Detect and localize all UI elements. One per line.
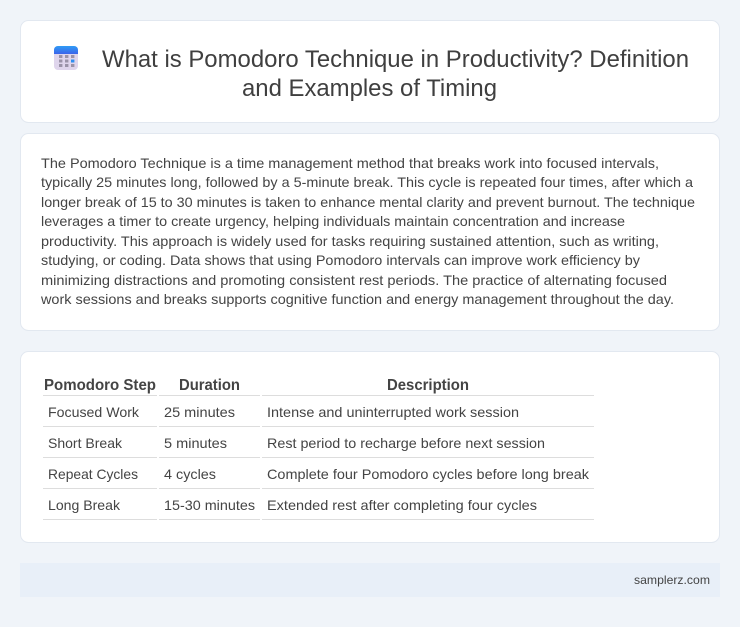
table header — [44, 377, 469, 394]
title: and Examples of Timing — [242, 75, 497, 102]
footer — [20, 563, 720, 597]
panel: table — [20, 352, 720, 542]
title: What is Pomodoro Technique in Productivity? Definition — [102, 46, 689, 73]
text block: definition paragraph: studying, or coding. Data shows that using Pomodoro intervals can improve work efficiency by — [41, 252, 640, 268]
row: short break: Short Break — [48, 435, 123, 451]
row: focused work — [48, 404, 519, 420]
table header: Duration — [179, 377, 240, 394]
icon: calendar — [54, 46, 78, 70]
text block: definition paragraph: work sessions and breaks supports cognitive function and energy management throughout the day. — [40, 291, 674, 307]
panel: description — [20, 134, 720, 330]
row: short break: Rest period to recharge before next session — [267, 435, 545, 451]
text block: definition paragraph: longer break of 15 to 30 minutes is taken to enhance mental clarity and prevent burnout. The technique — [41, 194, 695, 210]
row: focused work: 25 minutes — [164, 404, 235, 420]
text block: definition paragraph — [40, 155, 695, 307]
row: repeat cycles: Repeat Cycles — [48, 466, 138, 482]
row: repeat cycles: Complete four Pomodoro cycles before long break — [267, 466, 590, 482]
row: repeat cycles: 4 cycles — [164, 466, 216, 482]
row: focused work: Intense and uninterrupted work session — [267, 404, 519, 420]
footer source text: samplerz.com — [634, 573, 710, 587]
row: focused work: Focused Work — [48, 404, 140, 420]
panel: title header — [20, 20, 720, 122]
row: long break: Long Break — [48, 497, 121, 513]
table header: Description — [387, 377, 469, 394]
table header: Pomodoro Step — [44, 377, 156, 394]
text block: definition paragraph: productivity. This approach is widely used for tasks requiring sustained attention, such as writing, — [41, 233, 659, 249]
row: long break — [48, 497, 537, 513]
table: pomodoro steps — [43, 377, 594, 520]
text block: definition paragraph: The Pomodoro Technique is a time management method that breaks work into focused intervals, — [41, 155, 659, 171]
row: short break — [48, 435, 545, 451]
row: long break: Extended rest after completing four cycles — [267, 497, 537, 513]
row: short break: 5 minutes — [164, 435, 227, 451]
text block: definition paragraph: typically 25 minutes long, followed by a 5-minute break. This cycle is repeated four times, after which a — [41, 174, 693, 190]
row: long break: 15-30 minutes — [164, 497, 255, 513]
text block: definition paragraph: leverages a timer to create urgency, helping individuals maintain concentration and increase — [41, 213, 625, 229]
row: repeat cycles — [48, 466, 590, 482]
text block: definition paragraph: minimizing distractions and promoting consistent rest periods. The practice of alternating focused — [41, 272, 667, 288]
title — [102, 46, 689, 102]
